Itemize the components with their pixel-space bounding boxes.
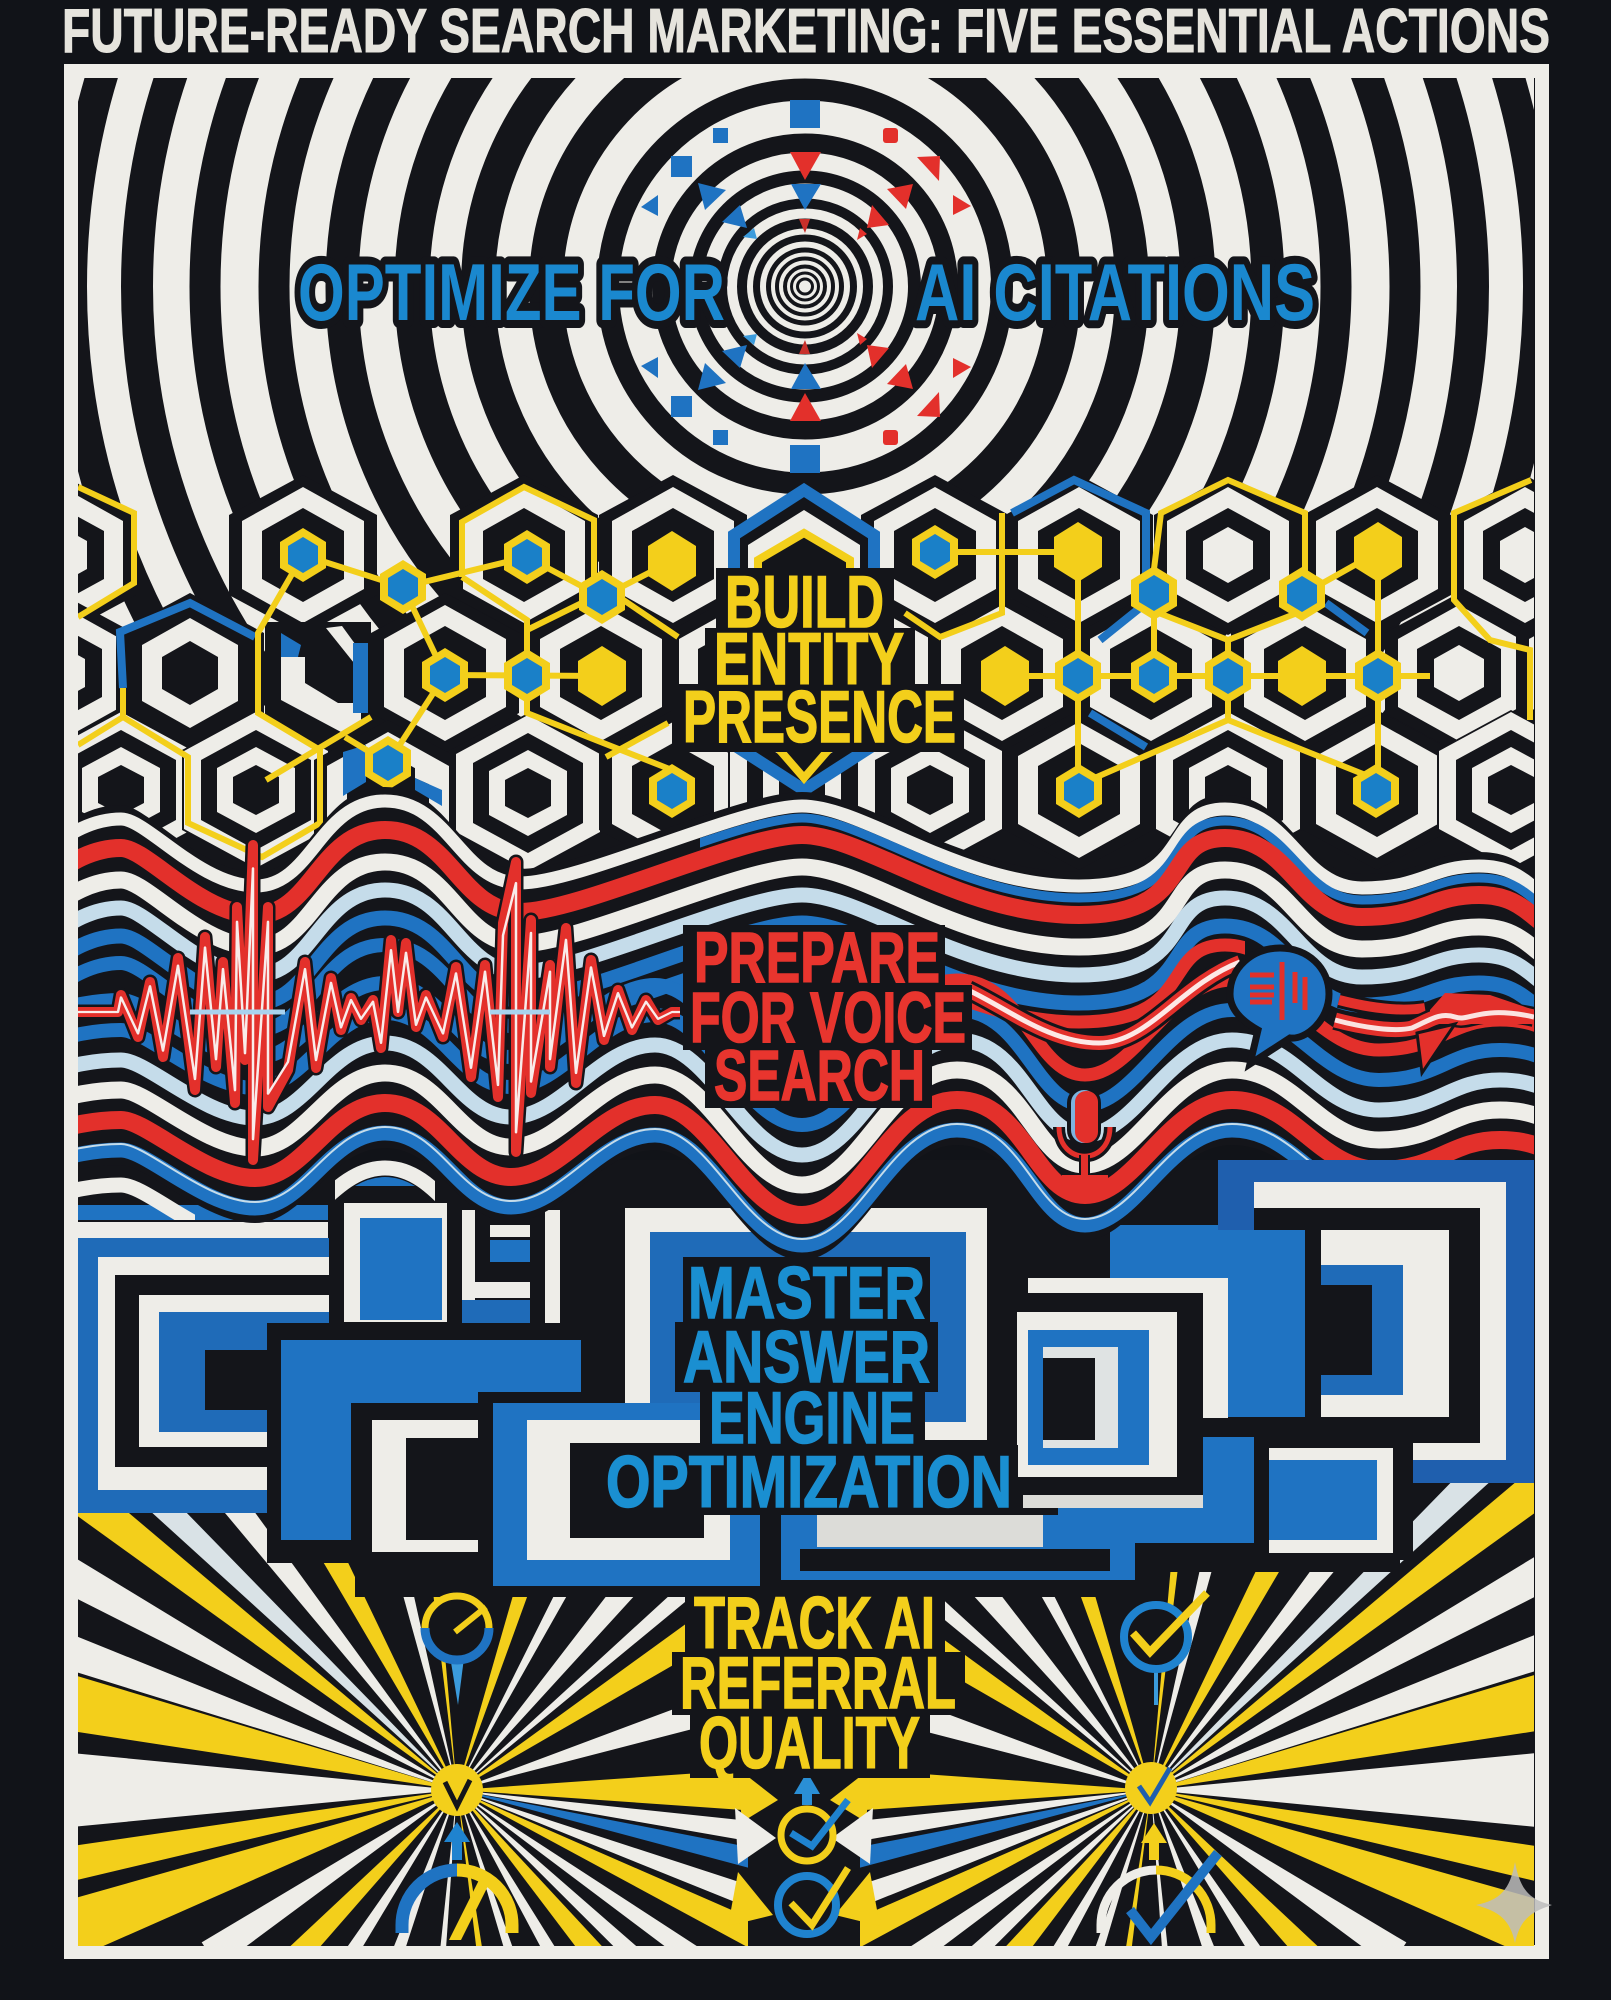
heading: prepare for voice search <box>683 919 972 1116</box>
icon: center up arrow <box>794 1778 820 1805</box>
heading: master answer engine optimization <box>598 1253 1018 1523</box>
heading: master answer engine optimization: OPTIMIZATION <box>606 1442 1012 1523</box>
icon: sparkle watermark <box>1476 1862 1552 1943</box>
panel: sound waves for voice search <box>40 787 1580 1280</box>
panel: overlapping blue blocks for answer engines <box>78 1160 1536 1597</box>
heading: build entity presence: ENTITY <box>714 619 904 700</box>
heading: build entity presence: PRESENCE <box>683 677 956 758</box>
right blue block over waves <box>1218 1160 1534 1230</box>
heading: optimize for AI citations: OPTIMIZE FOR <box>298 248 725 338</box>
panel: hexagon entity network <box>0 475 1611 880</box>
heading: master answer engine optimization: MASTER <box>688 1253 925 1334</box>
panel: radial rays for referral quality <box>78 1483 1534 1946</box>
icon: right up arrow <box>1141 1823 1167 1860</box>
heading: optimize for AI citations <box>294 256 1319 329</box>
blue and white shards near lower node <box>343 745 442 806</box>
heading: master answer engine optimization: ENGINE <box>709 1378 915 1459</box>
heading: prepare for voice search: SEARCH <box>714 1037 925 1116</box>
blue hexagon outlines <box>120 480 1367 747</box>
heading: track AI referral quality: QUALITY <box>699 1703 920 1784</box>
right ray fan with arrows <box>830 1483 1534 1946</box>
panel: gauge and check icons <box>402 1593 1218 1940</box>
small blue crest behind column block <box>355 1177 415 1186</box>
heading: track AI referral quality: REFERRAL <box>680 1643 956 1724</box>
voice waveform <box>78 845 680 1160</box>
icon: upper citation markers <box>641 100 971 240</box>
icon: right hub check <box>1125 1762 1177 1814</box>
red flag tail <box>1335 993 1534 1073</box>
icon: center check ring <box>781 1800 848 1861</box>
icon: microphone <box>1059 1088 1110 1186</box>
heading: build entity presence: BUILD <box>725 562 884 643</box>
network nodes <box>280 522 1402 818</box>
yellow network lines <box>78 480 1531 857</box>
heading: build entity presence <box>672 562 964 758</box>
icon: speech bubble <box>1230 948 1329 1064</box>
icon: lower citation markers <box>641 333 971 473</box>
heading: optimize for AI citations: AI CITATIONS <box>915 248 1315 338</box>
heading: prepare for voice search: FOR VOICE <box>690 979 966 1058</box>
icon: top right check ring <box>1124 1593 1207 1705</box>
broken hexagon gap <box>265 622 371 740</box>
icon: lower check ring <box>778 1868 848 1934</box>
heading: track AI referral quality: TRACK AI <box>694 1583 935 1664</box>
red waves beside voice heading <box>970 938 1534 1050</box>
icon: left hub check <box>431 1764 483 1816</box>
left ray fan with arrows <box>78 1513 778 1946</box>
heading: track AI referral quality <box>672 1583 965 1784</box>
icon: top left gauge <box>423 1594 491 1705</box>
icon: left up arrow <box>444 1822 470 1860</box>
icon: bottom right gauge with check <box>1101 1853 1218 1937</box>
panel: concentric rings for AI citations <box>78 78 1534 717</box>
heading: prepare for voice search: PREPARE <box>694 919 940 998</box>
heading: master answer engine optimization: ANSWER <box>683 1317 930 1398</box>
icon: bottom left gauge <box>402 1870 512 1940</box>
central chevron hexagon <box>734 490 874 790</box>
